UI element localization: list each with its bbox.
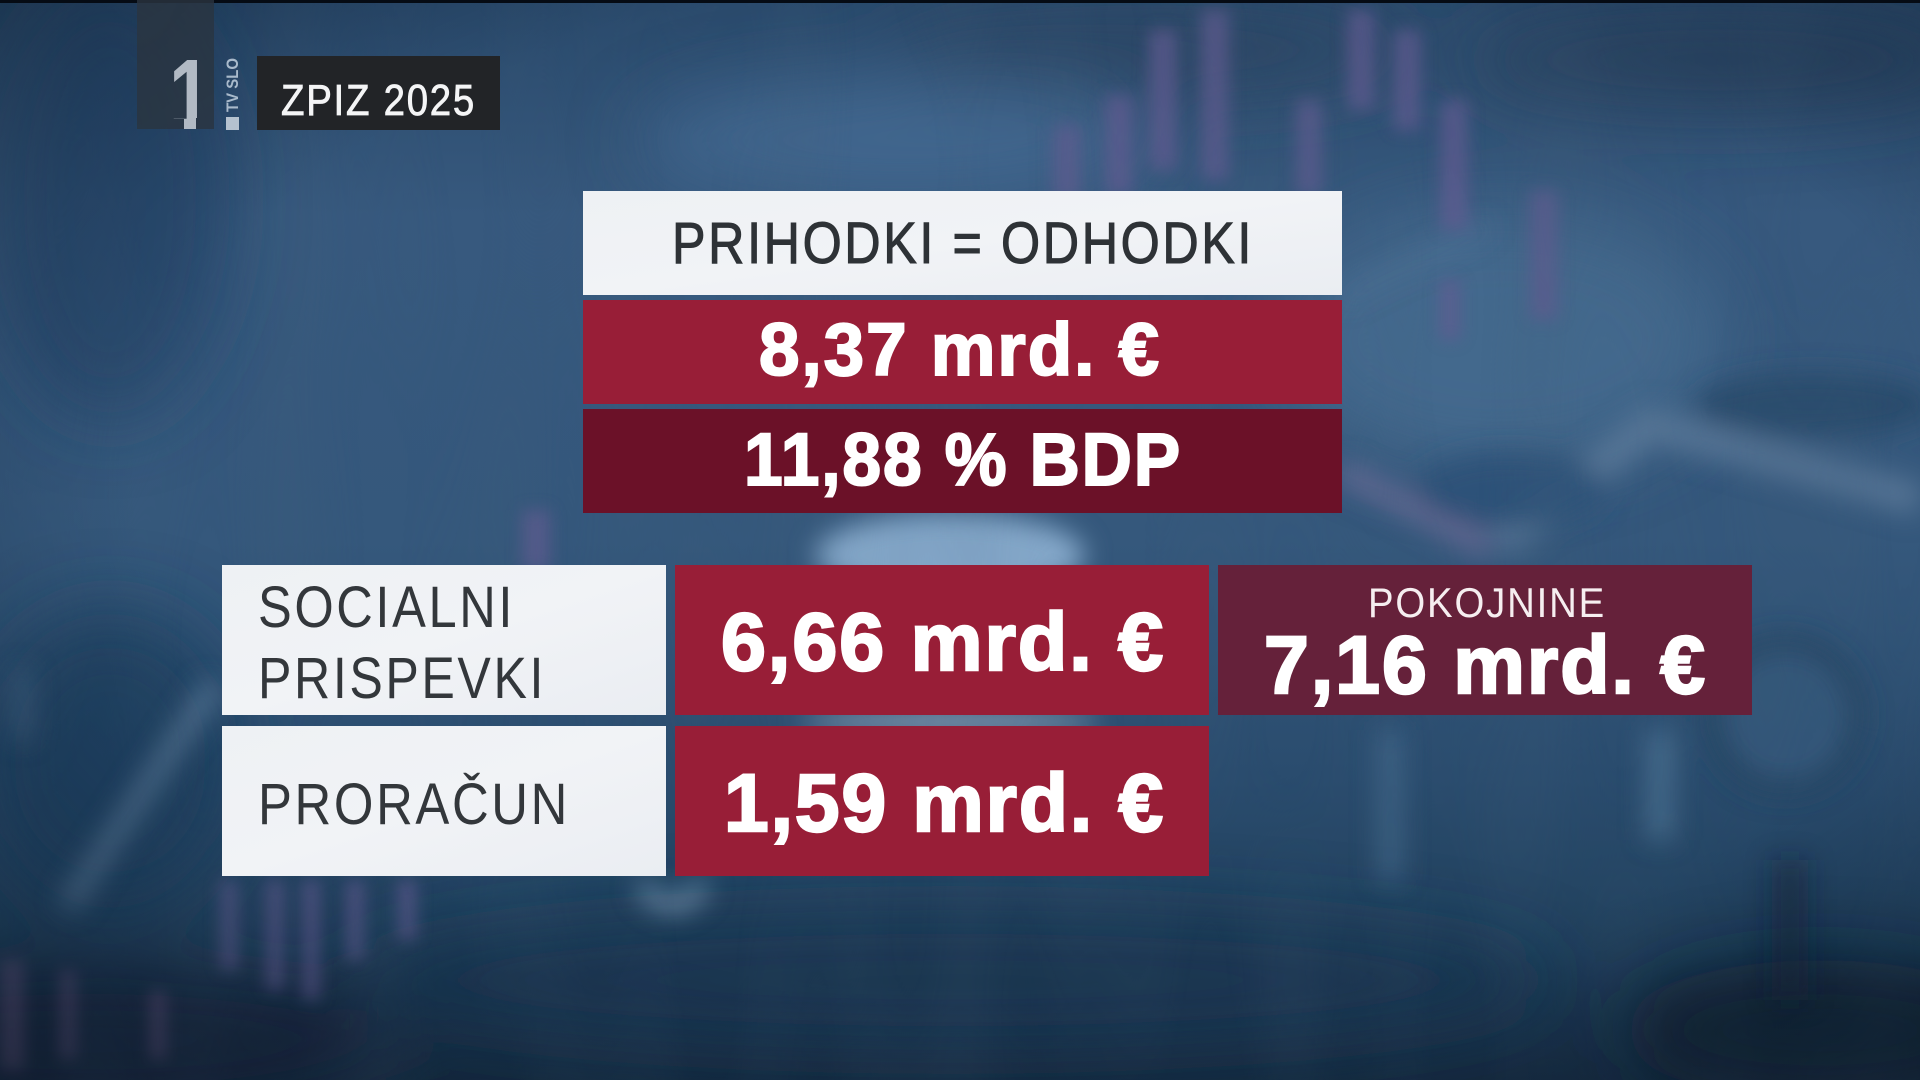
title tag [257, 56, 500, 130]
logo backing panel [137, 0, 214, 129]
value: budget: 1,59 mrd. € [724, 758, 1165, 849]
panel: pensions [1218, 565, 1752, 715]
label: social contributions: SOCIALNI [258, 575, 515, 640]
value: social contributions: 6,66 mrd. € [721, 597, 1165, 688]
value: social contributions [675, 565, 1209, 715]
heading: revenues equal expenditures [583, 191, 1342, 295]
pensions value: 7,16 mrd. € [1264, 620, 1707, 711]
pensions label: POKOJNINE [1368, 579, 1606, 626]
share of GDP: 11,88 % BDP [744, 418, 1182, 501]
logo square [226, 117, 239, 130]
heading: revenues equal expenditures: PRIHODKI = ODHODKI [672, 211, 1254, 276]
label: social contributions: PRISPEVKI [258, 646, 546, 711]
total amount [583, 300, 1342, 404]
panel: revenue sources [222, 565, 1209, 876]
label: budget [222, 726, 666, 876]
logo numeral 1: 1 [169, 39, 211, 151]
total amount: 8,37 mrd. € [759, 308, 1161, 391]
share of GDP [583, 409, 1342, 513]
label: social contributions [222, 565, 666, 715]
value: budget [675, 726, 1209, 876]
title tag: ZPIZ 2025 [281, 76, 476, 125]
label: budget: PRORAČUN [258, 772, 570, 837]
panel: headline summary [583, 191, 1342, 513]
channel logo: TV SLO 1 [137, 0, 239, 130]
logo text TV SLO: TV SLO [223, 58, 242, 112]
